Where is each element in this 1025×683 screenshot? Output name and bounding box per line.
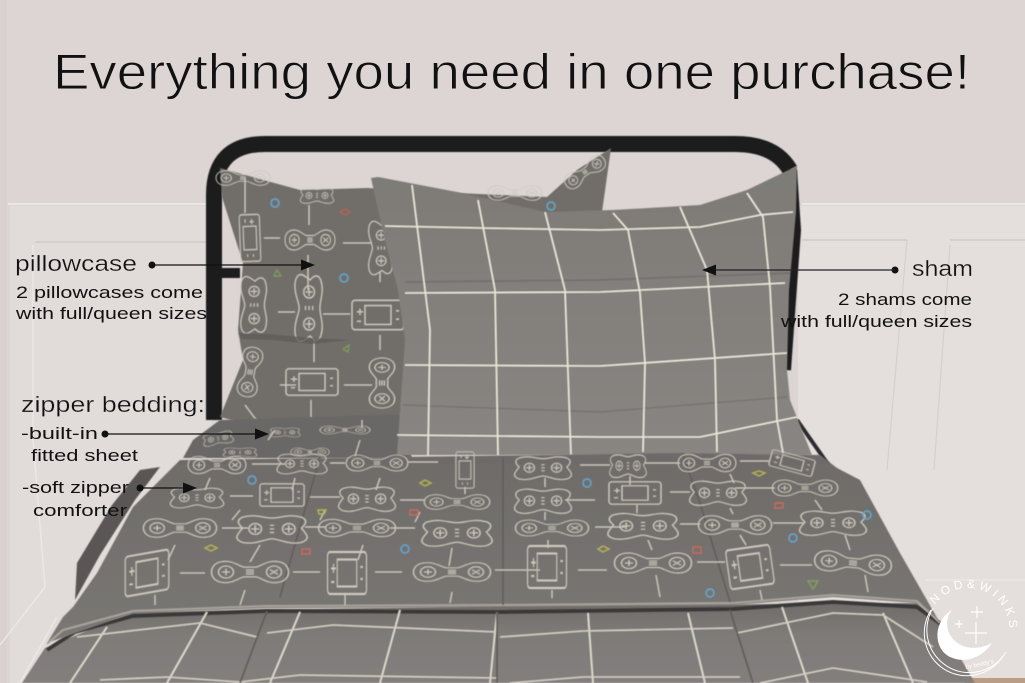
zipper comforter fold: [47, 449, 940, 644]
label: pillowcase: [15, 251, 315, 323]
headboard: [207, 144, 832, 470]
label: zipper bedding: [21, 392, 269, 520]
label: sham: 2 shams come: [838, 290, 972, 309]
arrow: fitted sheet: [102, 428, 269, 440]
label: zipper bedding: -built-in: [21, 424, 98, 443]
label: zipper bedding: comforter: [33, 501, 127, 520]
arrow: zipper comforter: [136, 482, 197, 494]
arrow: sham: [702, 264, 898, 276]
logo: Nod & Winks: by beddy's: [965, 659, 994, 671]
label: pillowcase: with full/queen sizes: [15, 304, 207, 323]
sham pillow: [371, 166, 812, 455]
logo: Nod & Winks: [924, 580, 1018, 676]
fitted sheet: [183, 414, 412, 458]
pillowcase pillow: [216, 148, 611, 425]
label: pillowcase: pillowcase: [15, 251, 137, 276]
label: zipper bedding: zipper bedding:: [21, 392, 205, 417]
label: zipper bedding: -soft zipper: [22, 478, 129, 497]
label: sham: with full/queen sizes: [780, 312, 972, 331]
label: sham: sham: [912, 256, 973, 281]
label: zipper bedding: fitted sheet: [31, 446, 138, 465]
title: Everything you need in one purchase!: [53, 44, 970, 100]
label: pillowcase: 2 pillowcases come: [16, 283, 203, 302]
label: sham: [702, 256, 973, 331]
lower quilted comforter: [22, 602, 975, 683]
arrow: pillowcase: [148, 260, 315, 270]
logo: Nod & Winks: NOD&WINKS: [930, 580, 1018, 628]
